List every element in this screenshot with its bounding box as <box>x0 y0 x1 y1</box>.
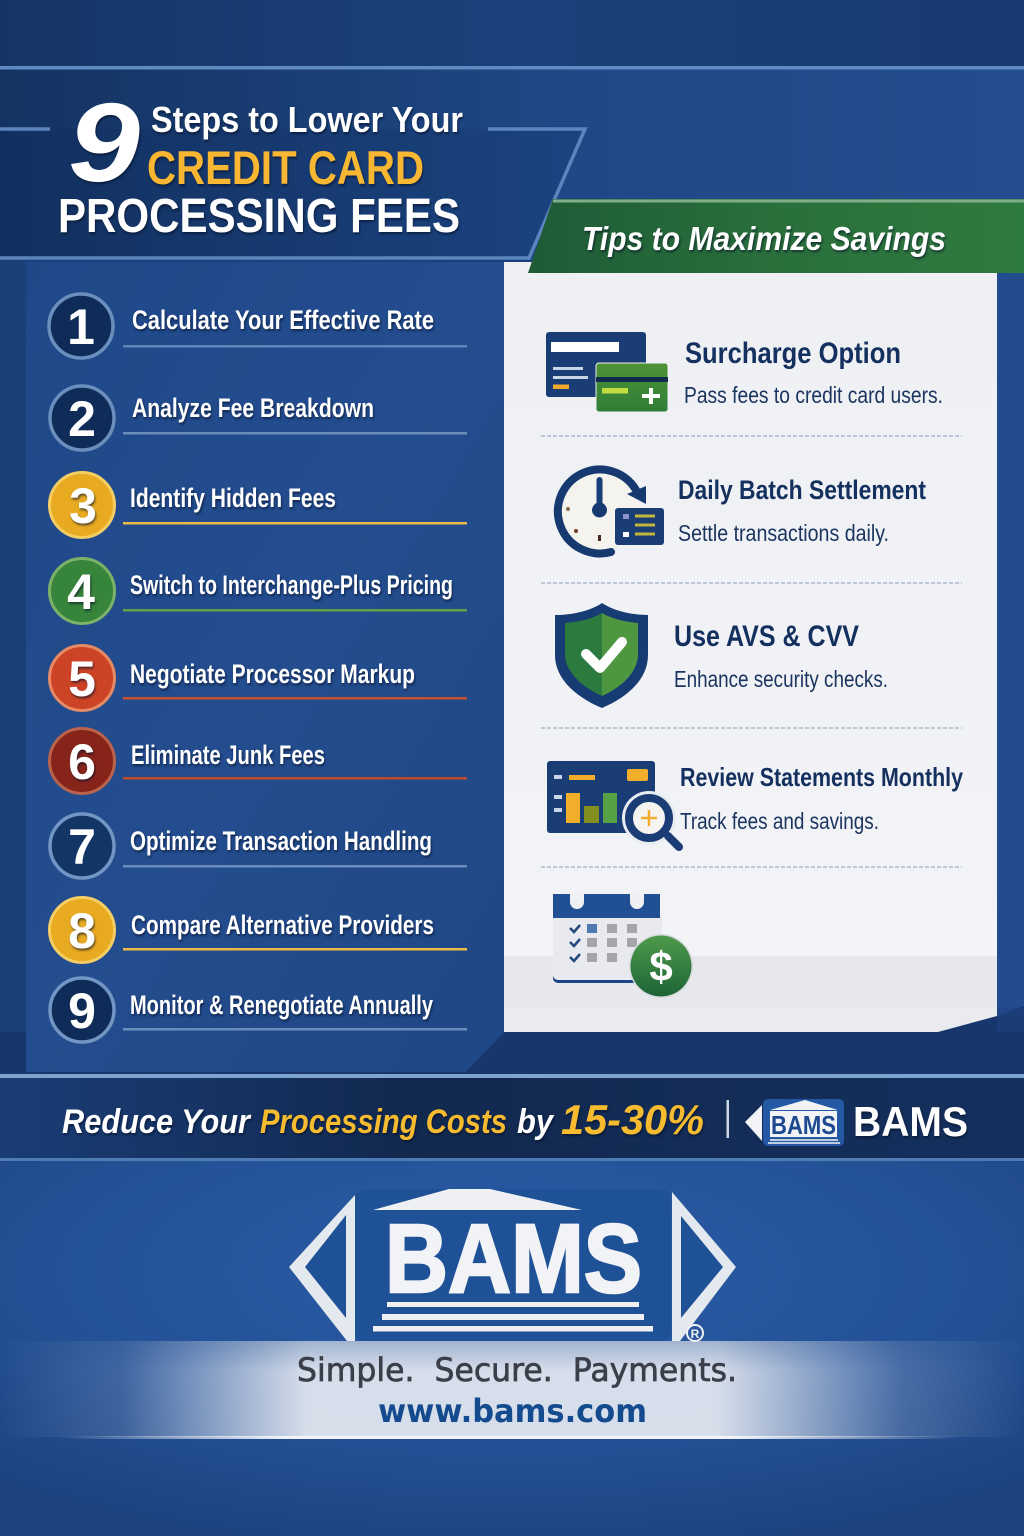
panel: tips <box>504 262 1024 1032</box>
header banner <box>0 129 587 259</box>
website: www.bams.com <box>378 1392 647 1430</box>
step 7: 7 <box>68 819 96 875</box>
title line 3: PROCESSING FEES <box>58 190 460 243</box>
ribbon: tips to maximize savings <box>528 199 1024 273</box>
step 3: Identify Hidden Fees <box>130 483 336 513</box>
title line 1: Steps to Lower Your <box>151 99 463 140</box>
tip: use AVS and CVV: Use AVS & CVV <box>674 620 859 653</box>
logo base lines <box>373 1302 653 1332</box>
step 8: 8 <box>68 903 96 959</box>
step 8 <box>50 898 467 962</box>
step 2: 2 <box>68 391 96 447</box>
step 9: 9 <box>68 983 96 1039</box>
step 6: 6 <box>68 734 96 790</box>
tip: surcharge option: Surcharge Option <box>685 337 901 370</box>
icon: shield <box>555 603 648 708</box>
step 7 <box>50 814 467 878</box>
tip: use AVS and CVV <box>555 603 888 708</box>
step 2: Analyze Fee Breakdown <box>132 393 374 423</box>
tip: use AVS and CVV: Enhance security checks. <box>674 666 888 692</box>
step 4: Switch to Interchange-Plus Pricing <box>130 570 453 600</box>
small BAMS logo <box>745 1099 844 1146</box>
step 2 <box>50 386 467 450</box>
tip: daily batch settlement <box>557 468 926 553</box>
step 1 <box>49 294 467 358</box>
tip: daily batch settlement: Settle transactions daily. <box>678 520 889 546</box>
tip: review statements monthly: Track fees and savings. <box>680 808 879 834</box>
savings message: Reduce Your <box>62 1103 252 1141</box>
right arrow <box>672 1192 736 1341</box>
BAMS wordmark: BAMS <box>853 1098 968 1145</box>
tip: surcharge option: Pass fees to credit card users. <box>684 382 943 408</box>
logo plate <box>355 1189 671 1341</box>
step 5: 5 <box>68 651 96 707</box>
title <box>58 80 463 243</box>
step 6: Eliminate Junk Fees <box>131 740 325 770</box>
registered mark: R <box>691 1327 700 1341</box>
step 6 <box>50 728 467 794</box>
step 5 <box>50 646 467 710</box>
tip: review statements monthly <box>547 761 963 847</box>
small BAMS logo: BAMS <box>771 1110 836 1140</box>
icon: calendar with dollar coin: $ <box>649 943 673 990</box>
icon: credit cards <box>546 332 668 412</box>
step 1: Calculate Your Effective Rate <box>132 305 434 335</box>
footer band <box>0 1341 1024 1439</box>
panel: steps <box>26 262 504 1072</box>
step 8: Compare Alternative Providers <box>131 910 434 940</box>
step 4: 4 <box>67 564 95 620</box>
step 9 <box>50 978 467 1042</box>
large BAMS logo <box>289 1189 736 1341</box>
icon: clock <box>557 468 664 553</box>
tagline: Simple. Secure. Payments. <box>297 1351 737 1389</box>
savings message: Processing Costs <box>260 1103 507 1141</box>
step 4 <box>50 558 467 624</box>
ribbon: tips to maximize savings: Tips to Maximize Savings <box>582 220 946 257</box>
savings banner <box>0 1074 1024 1161</box>
logo letters: BAMS <box>385 1204 642 1313</box>
step 7: Optimize Transaction Handling <box>130 826 432 856</box>
icon: chart with magnifier <box>547 761 679 847</box>
step 5: Negotiate Processor Markup <box>130 659 415 689</box>
title line 2: CREDIT CARD <box>147 141 424 194</box>
tip: daily batch settlement: Daily Batch Settlement <box>678 475 926 505</box>
tip: surcharge option <box>546 332 943 412</box>
registered mark <box>687 1325 703 1341</box>
left arrow <box>289 1195 355 1341</box>
roof <box>373 1189 582 1210</box>
step 1: 1 <box>67 299 95 355</box>
step 3 <box>50 472 467 538</box>
savings message: 15-30% <box>561 1096 704 1143</box>
tip: review statements monthly: Review Statements Monthly <box>680 762 963 792</box>
savings message: by <box>517 1103 555 1141</box>
title numeral 9: 9 <box>68 80 140 205</box>
step 3: 3 <box>69 478 97 534</box>
step 9: Monitor & Renegotiate Annually <box>130 990 433 1020</box>
savings message <box>62 1096 704 1143</box>
icon: calendar with dollar coin <box>553 894 693 998</box>
